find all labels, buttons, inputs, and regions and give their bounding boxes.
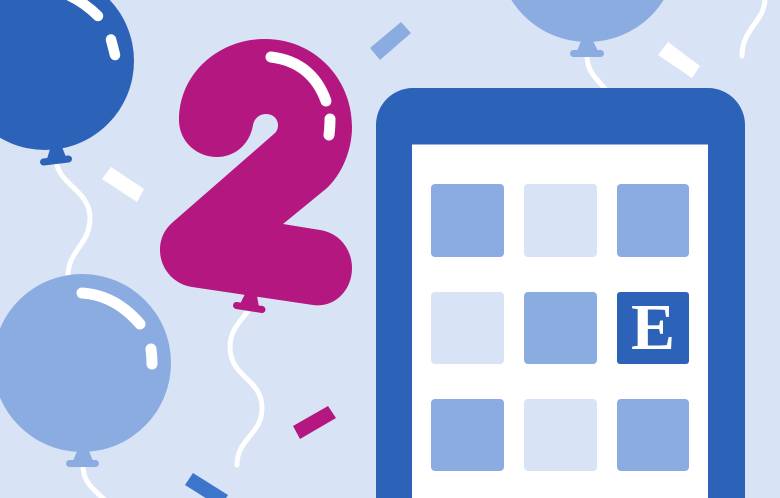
- app grid: [431, 184, 689, 471]
- balloon: bottom left light blue: [0, 274, 171, 498]
- number balloon: 2: [160, 39, 352, 465]
- top right string: [742, 0, 765, 56]
- tablet: [376, 88, 745, 498]
- balloon: top right light blue: [498, 0, 678, 90]
- confetti: [102, 22, 700, 498]
- balloon: top left dark blue: [0, 0, 134, 276]
- logo letter E: E: [631, 291, 675, 364]
